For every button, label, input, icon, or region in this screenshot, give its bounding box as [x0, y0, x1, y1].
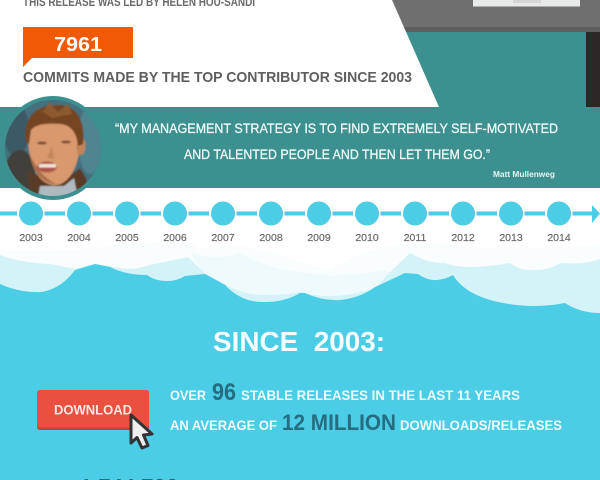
- timeline: [0, 202, 600, 244]
- text: average downloads line: [170, 410, 562, 435]
- text: average downloads line: AN AVERAGE OF: [170, 417, 277, 433]
- timeline year labels: 2004: [67, 232, 91, 244]
- text: average downloads line: DOWNLOADS/RELEASES: [400, 417, 562, 433]
- timeline year labels: 2012: [451, 232, 475, 244]
- timeline year labels: 2007: [211, 232, 235, 244]
- timeline year labels: 2003: [19, 232, 43, 244]
- timeline year labels: 2009: [307, 232, 331, 244]
- timeline year labels: 2014: [547, 232, 571, 244]
- timeline line and arrow: [0, 205, 600, 223]
- button: download: DOWNLOAD: [54, 402, 132, 418]
- timeline year labels: 2013: [499, 232, 523, 244]
- icon: portrait of Matt Mullenweg: [1, 96, 105, 200]
- text: stable releases line: 96: [212, 379, 236, 406]
- cloud: palest layer: [0, 240, 600, 330]
- timeline year labels: [19, 232, 571, 244]
- cloud: pale middle zone: [190, 252, 404, 300]
- cloud: light blue layer: [0, 253, 600, 360]
- text: commits caption: COMMITS MADE BY THE TOP CONTRIBUTOR SINCE 2003: [23, 69, 412, 86]
- heading: since 2003: SINCE 2003:: [213, 326, 385, 357]
- timeline year labels: 2008: [259, 232, 283, 244]
- panel: top right desk scene: [380, 0, 600, 107]
- text: quote attribution: Matt Mullenweg: [493, 169, 555, 179]
- timeline year labels: 2005: [115, 232, 139, 244]
- panel: clouds and blue background: [0, 240, 600, 480]
- text: average downloads line: 12 MILLION: [282, 410, 396, 435]
- button: download: [37, 390, 149, 430]
- panel: quote band: [0, 107, 600, 188]
- text: quote line 2: AND TALENTED PEOPLE AND THEN LET THEM GO.”: [184, 147, 490, 162]
- timeline year labels: 2010: [355, 232, 379, 244]
- text: stable releases line: STABLE RELEASES IN THE LAST 11 YEARS: [241, 387, 520, 403]
- cloud: blue main field: [0, 264, 600, 480]
- timeline year labels: 2006: [163, 232, 187, 244]
- text: stable releases line: OVER: [170, 387, 206, 403]
- timeline year labels: 2011: [404, 232, 426, 244]
- text: quote line 1: “MY MANAGEMENT STRATEGY IS TO FIND EXTREMELY SELF-MOTIVATED: [115, 121, 558, 136]
- callout: orange flag 7961: 7961: [54, 34, 102, 56]
- icon: mouse cursor: [131, 415, 152, 448]
- callout: orange flag 7961: [23, 27, 133, 67]
- timeline nodes: [19, 202, 571, 226]
- panel: white trapezoid: [0, 0, 439, 107]
- text: stable releases line: [170, 379, 520, 406]
